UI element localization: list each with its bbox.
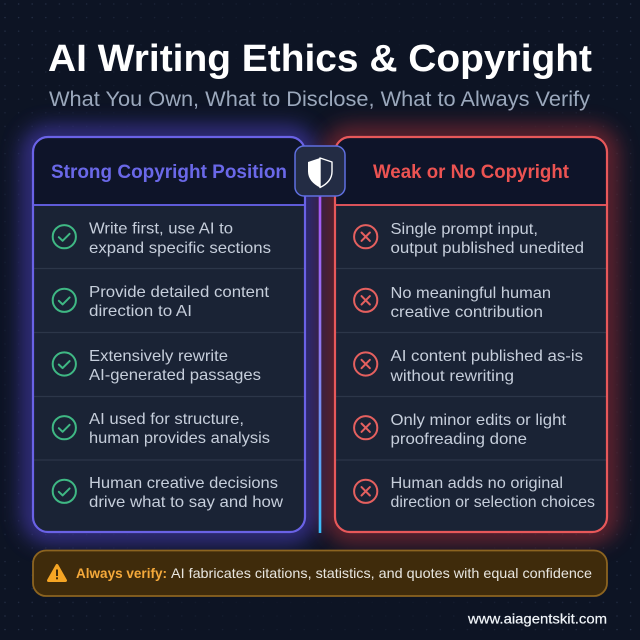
icon: warning triangle: [48, 566, 66, 580]
row 1: output published unedited: [390, 240, 584, 257]
heading: weak: Weak or No Copyright: [373, 162, 570, 183]
row 1: [354, 221, 584, 257]
row 3: AI content published as-is: [390, 348, 583, 365]
row 5: Human creative decisions: [89, 475, 278, 492]
row 1: [53, 220, 271, 257]
row 4: [53, 411, 270, 447]
row 4: proofreading done: [390, 431, 527, 448]
row 3: without rewriting: [389, 368, 514, 385]
row 1: Write first, use AI to: [89, 220, 233, 238]
center spine: [319, 190, 321, 533]
row dividers: [34, 268, 304, 460]
row 1: Single prompt input,: [390, 221, 538, 238]
row 5: direction or selection choices: [390, 494, 595, 511]
row 5: Human adds no original: [390, 475, 563, 492]
row 2: [354, 285, 551, 321]
title: AI Writing Ethics & Copyright: [48, 38, 592, 80]
row 2: Provide detailed content: [89, 284, 270, 301]
row 1: expand specific sections: [89, 240, 271, 257]
row 4: AI used for structure,: [89, 411, 244, 428]
row 2: direction to AI: [89, 303, 192, 320]
panel glows: [33, 137, 607, 532]
row dividers: [336, 268, 606, 460]
footer url: www.aiagentskit.com: [467, 610, 607, 626]
row 4: Only minor edits or light: [390, 412, 567, 429]
row 3: Extensively rewrite: [89, 348, 228, 365]
row 2: [53, 284, 270, 320]
row 5: drive what to say and how: [89, 494, 283, 511]
callout: always verify: [33, 550, 607, 596]
row 2: creative contribution: [390, 304, 543, 321]
callout: always verify: Always verify:: [76, 565, 167, 581]
heading: strong: Strong Copyright Position: [51, 162, 287, 183]
panel header: weak: [335, 137, 607, 206]
row 2: No meaningful human: [390, 285, 551, 302]
row 5: [354, 475, 595, 511]
subtitle: What You Own, What to Disclose, What to Always Verify: [49, 88, 591, 111]
row 3: AI-generated passages: [89, 367, 261, 384]
row 4: human provides analysis: [89, 430, 270, 447]
panel: strong copyright position: [33, 137, 305, 532]
row 5: [53, 475, 283, 511]
icon: shield badge: [295, 146, 345, 196]
row 4: [354, 412, 567, 448]
panel header: strong: [33, 137, 305, 206]
row 3: [53, 348, 261, 384]
panel: weak or no copyright: [335, 137, 607, 532]
callout: always verify: AI fabricates citations, statistics, and quotes with equal confidence: [171, 565, 592, 581]
row 3: [354, 348, 583, 385]
